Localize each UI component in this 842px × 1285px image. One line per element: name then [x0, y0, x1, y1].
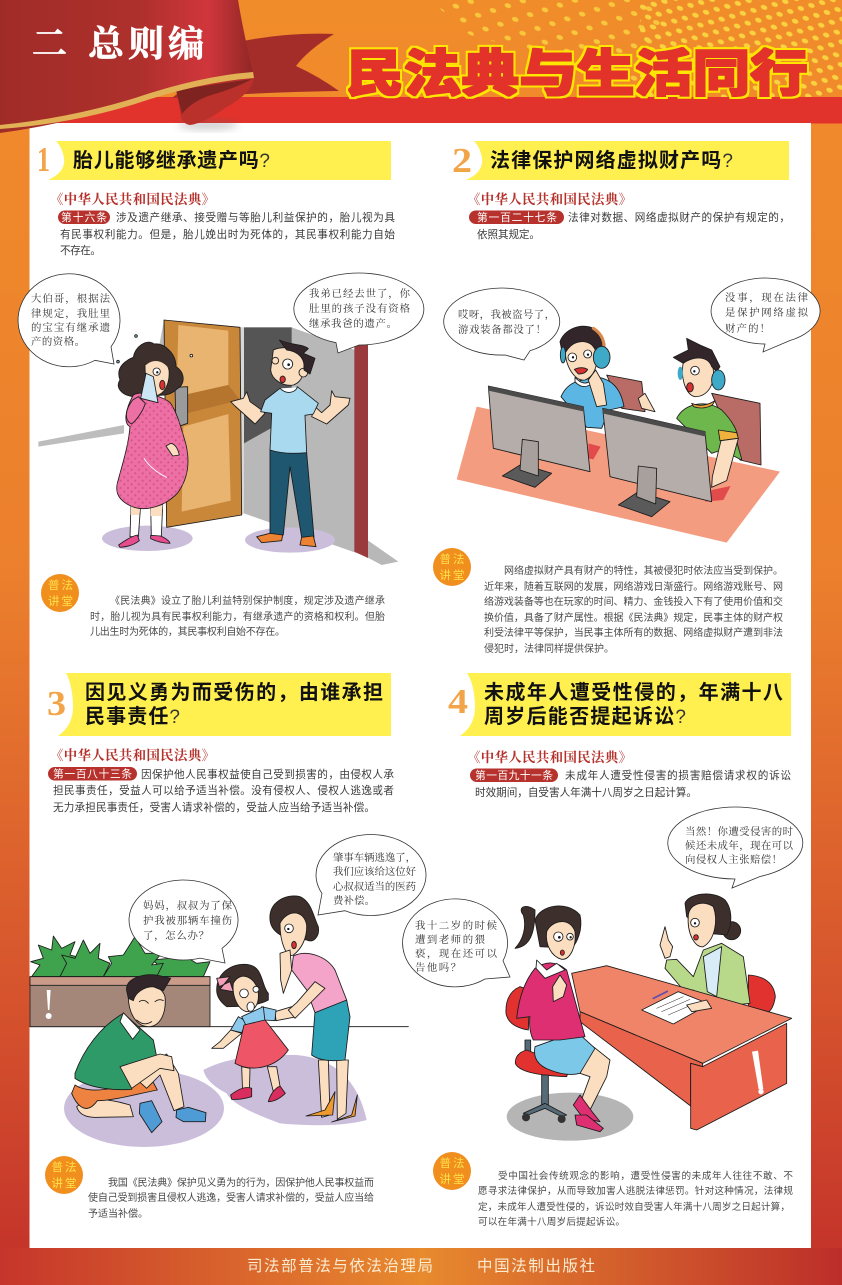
badge: law classroom: 普法	[52, 1160, 76, 1174]
number 1: 1	[37, 140, 50, 179]
speech bubble: student: 我十二岁的时候	[415, 917, 498, 932]
speech bubble: second gamer: 是保护网络虚拟	[725, 304, 809, 319]
explanation text	[88, 1176, 374, 1220]
article text: 无力承担民事责任，受害人请求补偿的，受益人应当给予适当补偿。	[53, 801, 375, 814]
explanation text: 予适当补偿。	[88, 1207, 148, 1220]
law title: 《中华人民共和国民法典》	[467, 191, 632, 208]
explanation text: 可以在年满十八周岁后提起诉讼。	[478, 1216, 625, 1228]
ribbon shadow	[178, 120, 238, 130]
footer text: ministry: 司法部普法与依法治理局	[247, 1257, 433, 1275]
explanation text: 侵犯时，法律同样提供保护。	[484, 642, 614, 655]
panel: question 2	[433, 141, 820, 655]
law title: 《中华人民共和国民法典》	[467, 749, 632, 766]
explanation text: 时，胎儿视为具有民事权利能力，有继承遗产的资格和权利。但胎	[90, 610, 385, 623]
badge: law classroom	[433, 548, 471, 586]
article text: 法律对数据、网络虚拟财产的保护有规定的，	[568, 211, 790, 224]
badge: law classroom: 普法	[440, 552, 464, 566]
illustration: pregnant woman and brother-in-law at door	[38, 320, 398, 565]
explanation text: 定，未成年人遭受性侵的，诉讼时效自受害人年满十八周岁之日起计算，	[478, 1201, 790, 1213]
badge: law classroom: 讲堂	[440, 568, 464, 582]
speech bubble: girl: 了，怎么办？	[143, 927, 209, 942]
article text	[477, 211, 790, 241]
ribbon gold stripe	[0, 72, 254, 129]
number 4: 4	[448, 682, 468, 721]
explanation text: 利受法律平等保护，当民事主体所有的数据、网络虚拟财产遭到非法	[484, 626, 783, 639]
article text: 依照其规定。	[477, 228, 540, 241]
question 4 text	[484, 680, 783, 728]
question 1 text: 胎儿能够继承遗产吗?	[73, 148, 270, 172]
heading bar 3	[58, 673, 391, 736]
badge: law classroom: 讲堂	[440, 1172, 464, 1186]
heading bar 1	[48, 141, 391, 180]
panel: question 3: 第一百八十三条	[53, 766, 132, 780]
explanation text	[484, 564, 783, 655]
article text: 担民事责任，受益人可以给予适当补偿。没有侵权人、侵权人逃逸或者	[53, 784, 394, 797]
speech bubble: girl	[129, 880, 238, 963]
explanation text: 受中国社会传统观念的影响，遭受性侵害的未成年人往往不敢、不	[498, 1170, 793, 1182]
speech bubble: man: 继承我爸的遗产。	[309, 315, 397, 330]
ribbon banner: 总则编	[88, 16, 204, 67]
girl	[242, 1067, 250, 1093]
law title: 《中华人民共和国民法典》	[50, 747, 215, 764]
badge: law classroom	[45, 1156, 83, 1194]
teacher	[748, 975, 775, 1013]
law title: 《中华人民共和国民法典》	[50, 191, 215, 208]
article chip	[48, 767, 137, 780]
explanation text: 近年来，随着互联网的发展，网络游戏日渐盛行。网络游戏账号、网	[484, 580, 783, 593]
seated man	[77, 1100, 133, 1117]
speech bubble: man: 肚里的孩子没有资格	[309, 300, 411, 315]
explanation text	[90, 594, 385, 638]
explanation text: 络游戏装备等也在玩家的时间、精力、金钱投入下有了使用价值和交	[484, 595, 783, 608]
speech bubble: girl: 护我被那辆车撞伤	[143, 912, 232, 927]
speech bubble: mother: 我们应该给这位好	[333, 863, 417, 878]
speech bubble: student: 告他吗？	[415, 959, 461, 974]
speech bubble: woman: 大伯哥，根据法	[31, 290, 111, 305]
question 2 text: 法律保护网络虚拟财产吗?	[490, 148, 733, 172]
panel: question 1	[18, 140, 424, 638]
speech bubble: mother: 费补偿。	[333, 892, 375, 907]
number 3: 3	[47, 684, 66, 723]
ribbon fold	[176, 76, 254, 125]
man	[231, 392, 265, 424]
speech bubble: mother: 肇事车辆逃逸了，	[333, 849, 416, 864]
question 4 text: 周岁后能否提起诉讼?	[484, 705, 686, 728]
speech bubble: second gamer: 没事，现在法律	[725, 289, 809, 304]
illustration: two gamers at computers	[457, 326, 780, 543]
ribbon tail	[172, 34, 339, 98]
speech bubble: second gamer	[711, 278, 820, 352]
panel: question 1: 第十六条	[61, 210, 107, 224]
speech bubble: girl: 妈妈，叔叔为了保	[143, 897, 233, 912]
ribbon banner	[0, 0, 339, 133]
badge: law classroom	[41, 574, 79, 612]
article text: 未成年人遭受性侵害的损害赔偿请求权的诉讼	[565, 769, 791, 782]
article text: 时效期间，自受害人年满十八周岁之日起计算。	[475, 786, 697, 799]
number 2: 2	[452, 141, 472, 180]
question 3 text	[85, 681, 383, 728]
speech bubble: mother: 心叔叔适当的医药	[333, 878, 416, 893]
speech bubble: student: 遭到老师的猥	[415, 931, 486, 946]
footer text: publisher: 中国法制出版社	[477, 1257, 595, 1275]
speech bubble: student	[403, 899, 510, 987]
question 4 text: 未成年人遭受性侵的，年满十八	[484, 680, 783, 704]
explanation text: 网络虚拟财产具有财产的特性，其被侵犯时依法应当受到保护。	[504, 564, 783, 577]
explanation text: 我国《民法典》保护见义勇为的行为，因保护他人民事权益而	[108, 1176, 374, 1189]
speech bubble: woman: 产的资格。	[31, 333, 85, 348]
mother	[318, 1060, 330, 1117]
article text	[53, 768, 394, 814]
panel: question 4	[403, 673, 803, 1228]
speech bubble: teacher: 候还未成年，现在可以	[685, 837, 794, 852]
speech bubble: first gamer: 哎呀，我被盗号了，	[458, 306, 555, 321]
speech bubble: teacher	[668, 807, 803, 888]
article text: 不存在。	[60, 244, 101, 257]
speech bubble: teacher: 向侵权人主张赔偿！	[685, 851, 782, 866]
heading bar 2	[466, 141, 789, 180]
badge: law classroom	[433, 1152, 471, 1190]
explanation text: 愿寻求法律保护，从而导致加害人逃脱法律惩罚。针对这种情况，法律规	[478, 1185, 793, 1197]
badge: law classroom: 讲堂	[48, 594, 73, 608]
section heading: 二	[32, 17, 67, 67]
speech bubble: second gamer: 财产的！	[725, 320, 770, 335]
article text: 因保护他人民事权益使自己受到损害的，由侵权人承	[141, 768, 394, 781]
badge: law classroom: 普法	[440, 1156, 464, 1170]
speech bubble: first gamer	[444, 288, 560, 360]
ribbon body	[0, 0, 254, 133]
student	[525, 1040, 531, 1053]
article text	[475, 769, 791, 799]
article text: 有民事权利能力。但是，胎儿娩出时为死体的，其民事权利能力自始	[60, 228, 395, 241]
panel: question 3	[30, 673, 426, 1220]
main title: 民法典与生活同行	[346, 34, 808, 106]
speech bubble: woman	[18, 274, 120, 367]
question 3 text: 因见义勇为而受伤的，由谁承担	[85, 681, 383, 704]
papers	[642, 992, 709, 1024]
panel: question 2: 第一百二十七条	[477, 210, 557, 224]
badge: law classroom: 讲堂	[52, 1176, 76, 1190]
speech bubble: first gamer: 游戏装备都没了！	[458, 321, 546, 336]
halftone dot pattern	[430, 0, 842, 97]
article chip	[58, 210, 110, 224]
speech bubble: teacher: 当然！你遭受侵害的时	[685, 823, 794, 838]
article text: 涉及遗产继承、接受赠与等胎儿利益保护的，胎儿视为具	[116, 211, 395, 224]
speech bubble: man: 我弟已经去世了，你	[309, 285, 411, 300]
speech bubble: woman: 律规定，我肚里	[31, 305, 110, 320]
illustration: student consults teacher at desk	[506, 894, 792, 1141]
article chip	[469, 210, 564, 224]
red header band	[29, 97, 842, 124]
article chip	[470, 768, 558, 782]
article text	[60, 211, 395, 257]
desk	[572, 966, 792, 1063]
explanation text	[478, 1170, 793, 1228]
speech bubble: man	[294, 273, 424, 353]
illustration: injured man, girl and mother	[30, 896, 408, 1147]
woman	[130, 503, 141, 537]
explanation text: 使自己受到损害且侵权人逃逸，受害人请求补偿的，受益人应当给	[88, 1191, 374, 1204]
speech bubble: mother	[316, 835, 426, 916]
explanation text: 换价值，具备了财产属性。根据《民法典》规定，民事主体的财产权	[484, 611, 783, 624]
badge: law classroom: 普法	[48, 578, 73, 592]
panel: question 4: 第一百九十一条	[475, 768, 553, 782]
explanation text: 儿出生时为死体的，其民事权利自始不存在。	[90, 625, 285, 638]
footer band	[0, 1248, 842, 1285]
speech bubble: woman: 的宝宝有继承遗	[31, 319, 110, 334]
speech bubble: student: 亵，现在还可以	[415, 945, 498, 960]
question 3 text: 民事责任?	[85, 705, 180, 728]
explanation text: 《民法典》设立了胎儿利益特别保护制度，规定涉及遗产继承	[110, 594, 385, 607]
heading bar 4	[460, 673, 791, 736]
